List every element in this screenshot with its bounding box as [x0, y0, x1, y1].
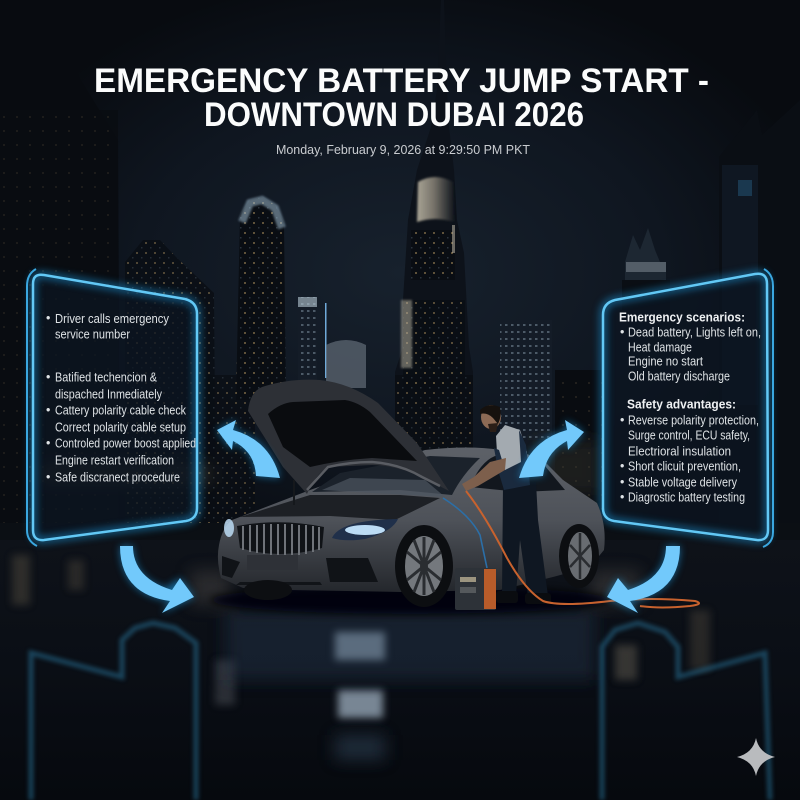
car body [218, 448, 605, 592]
arm [462, 458, 506, 491]
headlights [224, 519, 398, 540]
step list: service number [55, 328, 130, 342]
safety advantages: Safety advantages: [627, 396, 736, 412]
arrow: top left [217, 420, 280, 478]
icon: sparkle [737, 738, 775, 776]
right dark towers [719, 100, 800, 540]
small towers centre left [298, 297, 366, 388]
distant glow behind car [40, 440, 600, 495]
arrow: top right [519, 420, 584, 478]
car shadow [210, 586, 610, 614]
emergency scenarios: Emergency scenarios: [619, 310, 745, 324]
safety advantages: • [620, 475, 624, 489]
rear wheel [559, 524, 599, 588]
grille [237, 522, 324, 556]
safety advantages: Short clicuit prevention, [628, 460, 741, 474]
low city lights left [205, 375, 255, 525]
ground reflections [12, 555, 770, 800]
safety advantages: Diagrostic battery testing [628, 490, 745, 504]
step list: Safe discranect procedure [55, 470, 180, 484]
safety advantages: Surge control, ECU safety, [628, 428, 750, 442]
head [480, 405, 501, 432]
arrow: bottom left [120, 546, 194, 613]
panel: process steps [27, 269, 197, 546]
mid left building [125, 240, 216, 530]
city skyline [0, 0, 800, 540]
side windows [470, 456, 565, 492]
crown tower right [622, 228, 670, 310]
safety advantages: • [620, 459, 624, 473]
step list: Driver calls emergency [55, 312, 170, 326]
open hood [248, 380, 449, 494]
lit tower [236, 197, 286, 400]
safety advantages: Reverse polarity protection, [628, 414, 759, 428]
front right wheel [395, 525, 453, 607]
emergency scenarios: Engine no start [628, 354, 703, 368]
step list: • [46, 370, 50, 384]
tower right of Burj [500, 320, 552, 440]
emergency scenarios: Old battery discharge [628, 370, 730, 384]
car [218, 380, 605, 607]
emergency scenarios: Dead battery, Lights left on, [628, 326, 761, 340]
step list [46, 311, 196, 484]
reflected panel outlines [31, 623, 770, 800]
step list: • [46, 470, 50, 484]
step list: dispached Inmediately [55, 388, 163, 402]
Burj tower [395, 0, 473, 450]
step list: • [46, 436, 50, 450]
apron [494, 430, 530, 490]
step list: • [46, 311, 50, 325]
hood top [240, 495, 440, 520]
step list: Cattery polarity cable check [55, 404, 187, 418]
plate and lower intake [222, 555, 378, 585]
hood prop rod [293, 480, 295, 505]
emergency scenarios [619, 310, 761, 384]
horizon strip [0, 523, 800, 545]
title: EMERGENCY BATTERY JUMP START - [94, 62, 709, 100]
cable: blue [443, 498, 487, 568]
arrow: bottom right [607, 546, 680, 613]
cable: orange [466, 491, 699, 608]
step list: • [46, 403, 50, 417]
safety advantages: Stable voltage delivery [628, 476, 738, 490]
title [94, 62, 709, 134]
safety advantages: Electrioral insulation [628, 444, 731, 458]
legs [502, 482, 548, 596]
emergency scenarios: Heat damage [628, 340, 692, 354]
wet ground [0, 540, 800, 800]
panel: scenarios and safety [603, 269, 773, 547]
jump starter box [455, 568, 496, 610]
title: DOWNTOWN DUBAI 2026 [204, 96, 584, 134]
boots [496, 591, 551, 604]
emergency scenarios: • [620, 325, 624, 339]
windshield [312, 456, 480, 495]
step list: Controled power boost applied [55, 436, 196, 450]
left dark towers [0, 0, 120, 540]
step list: Batified techencion & [55, 370, 158, 384]
step list: Engine restart verification [55, 454, 174, 468]
low city lights right [555, 370, 605, 510]
shirt [496, 425, 527, 470]
safety advantages: • [620, 490, 624, 504]
safety advantages: • [620, 413, 624, 427]
front left wheel [244, 580, 292, 600]
night sky background [0, 0, 800, 545]
step list: Correct polarity cable setup [55, 420, 186, 434]
safety advantages [620, 396, 759, 504]
date line: Monday, February 9, 2026 at 9:29:50 PM PKT [276, 142, 530, 157]
technician [462, 405, 551, 604]
